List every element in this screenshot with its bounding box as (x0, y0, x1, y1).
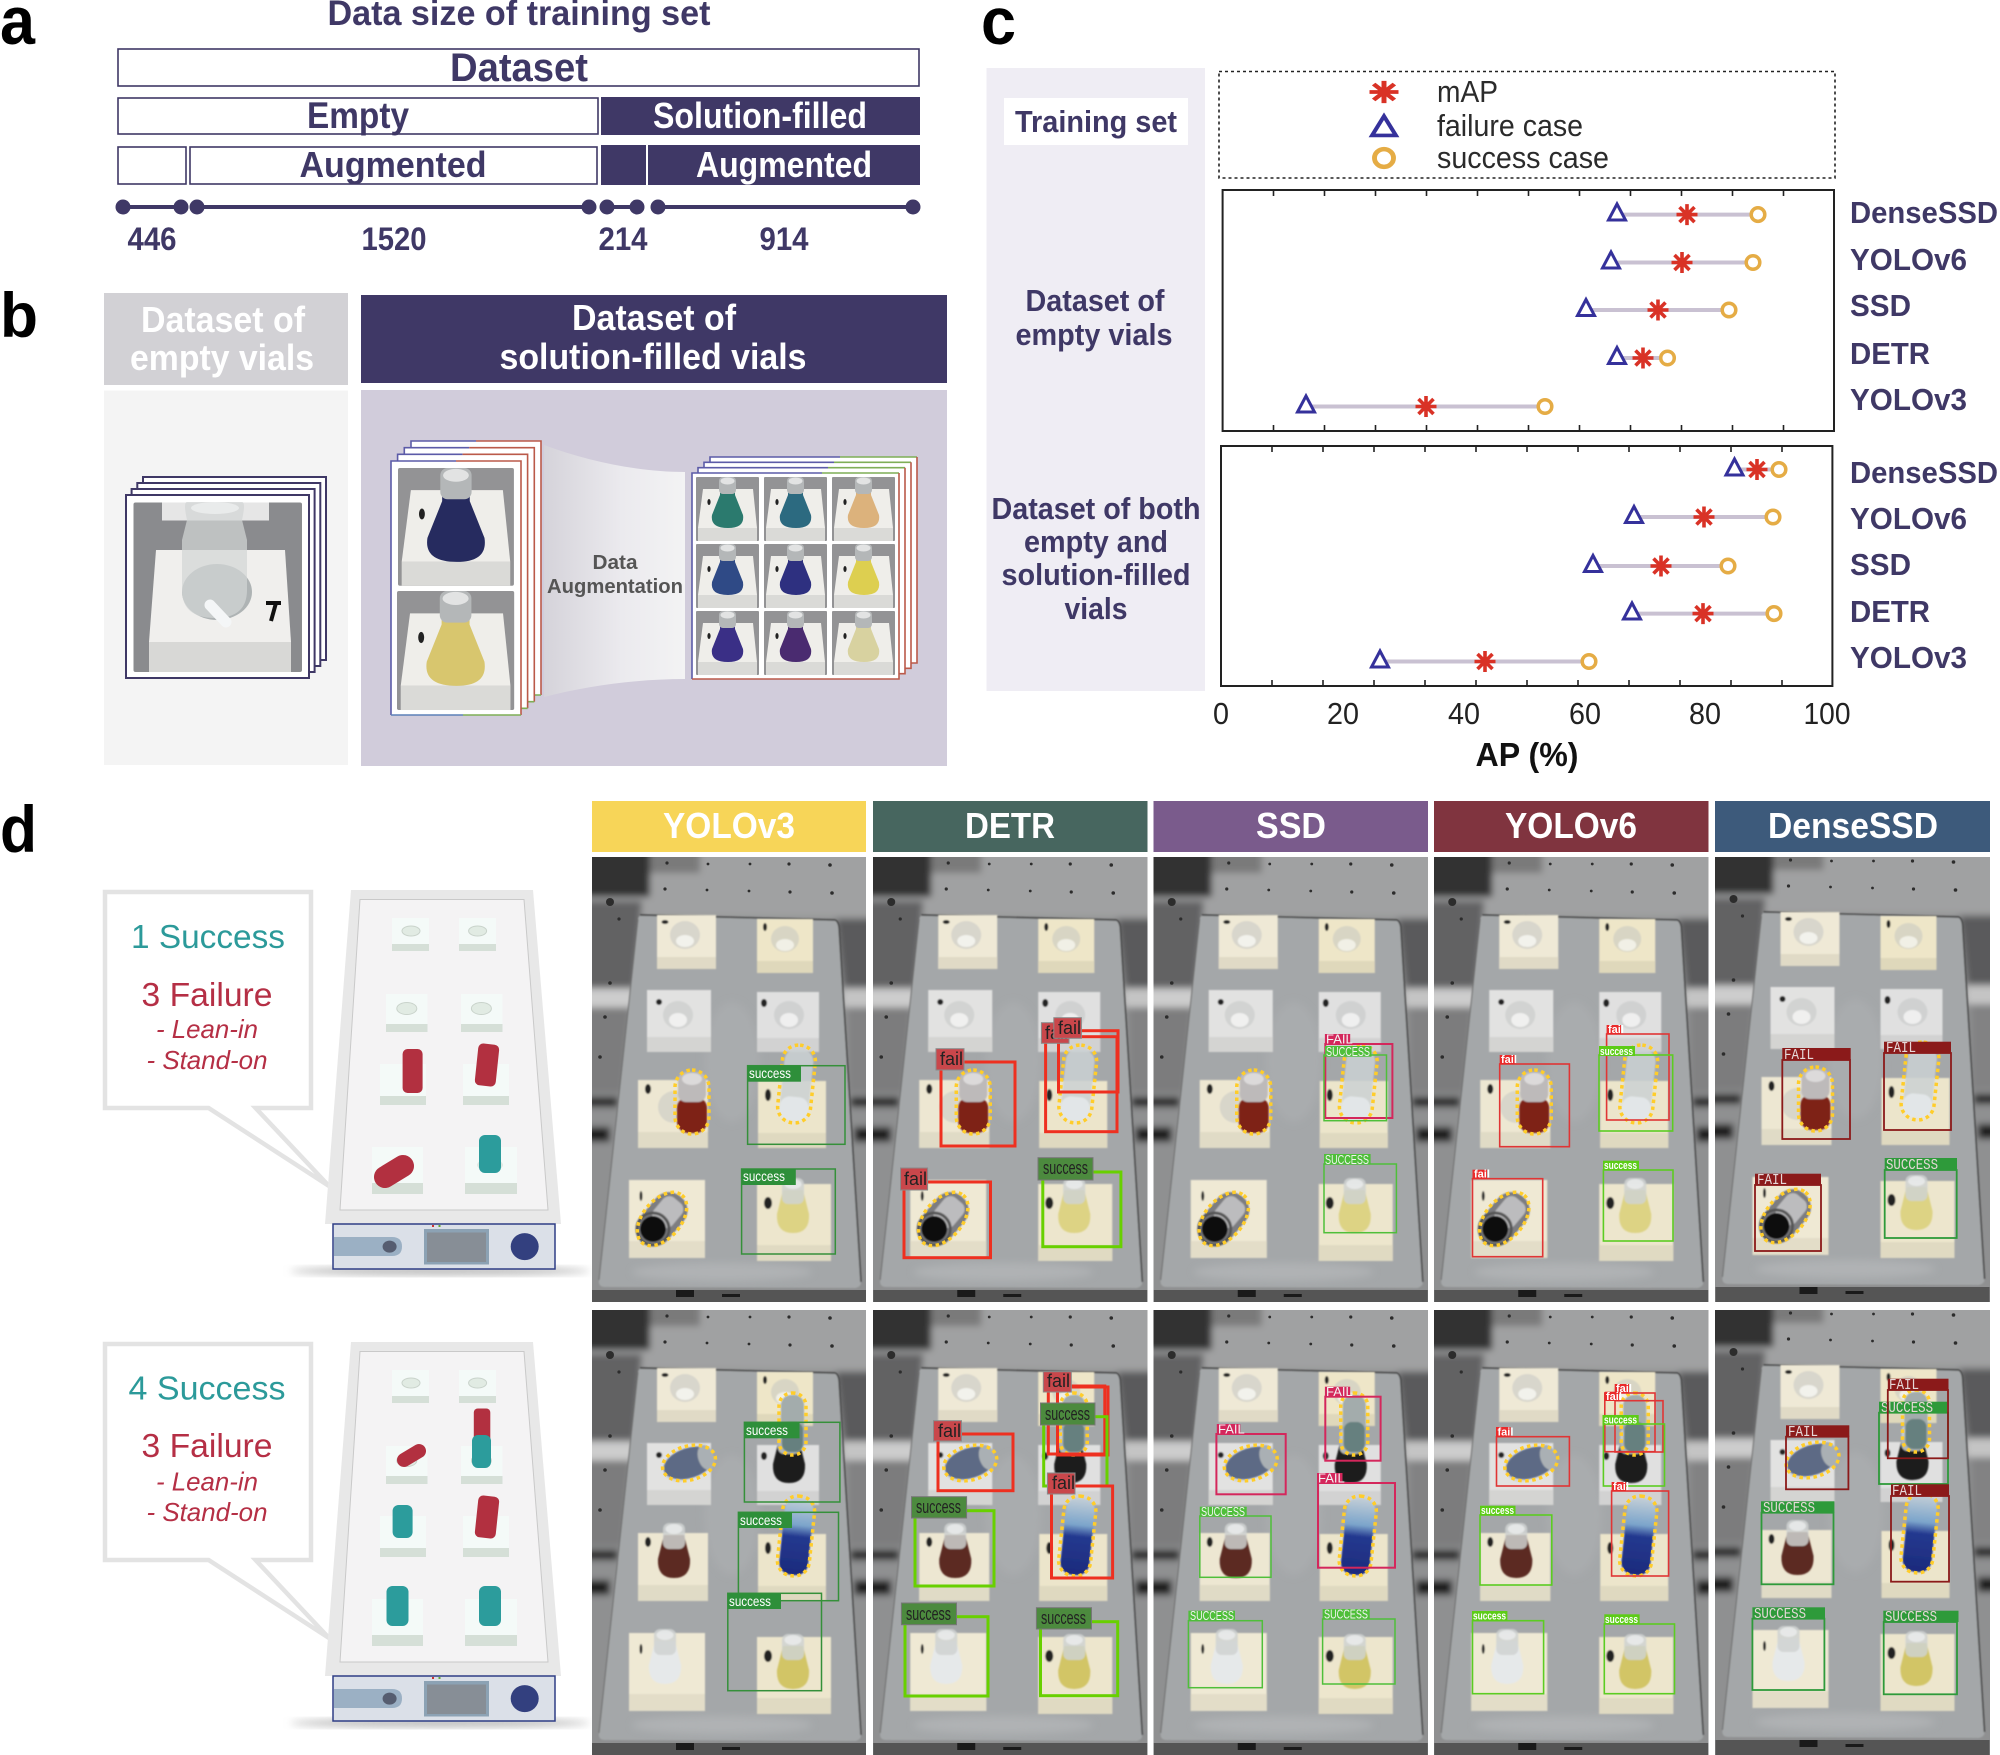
model labels: SSD (1850, 288, 1911, 323)
legend: mAP (1437, 74, 1498, 109)
photo: DETR scenario 1: fail (1058, 1018, 1081, 1038)
panel a: data size of training set (116, 0, 920, 257)
photo: YOLOv6 scenario 2: fail (1606, 1391, 1622, 1403)
callout: first scenario counts: 3 Failure (142, 976, 272, 1013)
model labels: YOLOv3 (1850, 382, 1967, 417)
photo: DenseSSD scenario 2: SUCCESS (1881, 1400, 1933, 1417)
photo: DenseSSD scenario 2 (1706, 1297, 2000, 1755)
header: dataset of empty vials (104, 293, 348, 385)
model labels: DETR (1850, 594, 1930, 629)
header: YOLOv3: YOLOv3 (663, 805, 795, 846)
photo: DenseSSD scenario 2: FAIL (1889, 1377, 1919, 1394)
photo: YOLOv3 scenario 1: success (749, 1065, 791, 1081)
funnel: data augmentation: Data (592, 551, 638, 574)
header: DETR (873, 801, 1148, 852)
model labels: YOLOv6 (1850, 501, 1967, 536)
bar: solution-filled: Solution-filled (653, 95, 867, 136)
photo: SSD scenario 2: FAIL (1318, 1470, 1345, 1486)
x axis title: AP (%) (1476, 736, 1578, 773)
header: DETR: DETR (965, 805, 1055, 846)
photo: YOLOv6 scenario 2: success (1481, 1505, 1514, 1517)
callout: first scenario counts: - Stand-on (146, 1045, 268, 1075)
photo: SSD scenario 2: FAIL (1326, 1384, 1353, 1399)
header: YOLOv6 (1434, 801, 1708, 852)
photo: DETR scenario 1: fail (1045, 1023, 1068, 1043)
photo: DenseSSD scenario 1 (1706, 844, 2000, 1324)
header: dataset of empty vials: empty vials (130, 337, 314, 378)
photo: YOLOv3 scenario 2: success (746, 1422, 788, 1438)
callout: second scenario counts (105, 1344, 329, 1638)
photo: DETR scenario 2: fail (1052, 1473, 1075, 1493)
image stack: augmented filled vials (692, 457, 917, 679)
bar: empty (118, 95, 598, 136)
photo: DETR scenario 1 (863, 847, 1157, 1327)
photo: YOLOv6 scenario 2: fail (1498, 1426, 1513, 1438)
model labels: YOLOv3 (1850, 640, 1967, 675)
photo: SSD scenario 1: SUCCESS (1325, 1152, 1369, 1167)
callout: first scenario counts (105, 892, 329, 1186)
photo: DETR scenario 2 (863, 1300, 1157, 1755)
photo: SSD scenario 1: SUCCESS (1326, 1044, 1370, 1059)
photo: DETR scenario 2: success (916, 1497, 961, 1517)
bar: empty augmented: Augmented (300, 144, 486, 185)
photo: DenseSSD scenario 2: FAIL (1788, 1424, 1818, 1441)
photo: DenseSSD scenario 1: FAIL (1757, 1172, 1787, 1189)
header: YOLOv3 (592, 801, 866, 852)
photo: DenseSSD scenario 2: SUCCESS (1754, 1606, 1806, 1623)
photo: DETR scenario 1: fail (904, 1169, 927, 1189)
photo: SSD scenario 2 (1144, 1300, 1438, 1755)
panel label b: b (0, 281, 38, 351)
bar: empty: Empty (307, 95, 409, 136)
sidebar: training set: empty and (1024, 524, 1168, 559)
legend (1219, 72, 1835, 178)
bar: empty augmented (190, 144, 597, 185)
bar: dataset (118, 46, 919, 90)
photo: DETR scenario 2: fail (1047, 1371, 1070, 1391)
x axis labels: 20 (1327, 696, 1359, 731)
photo: YOLOv3 scenario 2: success (729, 1593, 771, 1609)
image stack: empty vial (126, 477, 326, 678)
photo: SSD scenario 2: SUCCESS (1201, 1504, 1245, 1519)
photo: DETR scenario 2: success (1041, 1608, 1086, 1628)
model labels: DETR (1850, 336, 1930, 371)
header: dataset of empty vials: Dataset of (141, 299, 306, 340)
x axis labels: 80 (1689, 696, 1721, 731)
photo: SSD scenario 1: FAIL (1326, 1032, 1353, 1046)
photo: DenseSSD scenario 1: SUCCESS (1886, 1157, 1938, 1174)
panel b: empty vials dataset (104, 293, 348, 765)
illustration: second hot plate (290, 1342, 590, 1727)
photo: DETR scenario 1: success (1043, 1158, 1088, 1178)
header: YOLOv6: YOLOv6 (1505, 805, 1637, 846)
photo: DenseSSD scenario 2: SUCCESS (1763, 1500, 1815, 1517)
callout: second scenario counts: 3 Failure (142, 1427, 272, 1464)
header: DenseSSD (1715, 801, 1990, 852)
model labels: SSD (1850, 547, 1911, 582)
legend: failure case (1437, 108, 1583, 143)
photo: YOLOv6 scenario 2: fail (1613, 1481, 1629, 1493)
photo: DETR scenario 2: success (1045, 1404, 1090, 1424)
bar: dataset: Dataset (450, 46, 588, 90)
model labels: YOLOv6 (1850, 242, 1967, 277)
photo: YOLOv3 scenario 1 (582, 847, 876, 1327)
photo: DenseSSD scenario 2: SUCCESS (1885, 1609, 1937, 1626)
header: dataset of solution-filled vials: Dataset of (572, 297, 737, 338)
header: SSD (1154, 801, 1428, 852)
timeline with counts: 214 (598, 221, 648, 257)
photo: YOLOv6 scenario 2: success (1473, 1610, 1506, 1622)
photo: SSD scenario 2: FAIL (1218, 1422, 1245, 1436)
x axis labels: 60 (1569, 696, 1601, 731)
x axis labels: 100 (1804, 696, 1850, 731)
bar: filled original (601, 145, 646, 185)
callout: first scenario counts: 1 Success (131, 918, 285, 955)
callout: first scenario counts: - Lean-in (156, 1014, 258, 1044)
funnel: data augmentation: Augmentation (547, 575, 683, 598)
photo: DenseSSD scenario 2: FAIL (1892, 1483, 1922, 1500)
sidebar: training set: Dataset of both (992, 491, 1200, 526)
image stack: original filled vials (391, 441, 541, 715)
photo: YOLOv6 scenario 1: success (1600, 1046, 1633, 1058)
funnel: data augmentation (544, 445, 685, 697)
photo: DETR scenario 2: success (906, 1604, 951, 1624)
sidebar: training set: Training set (1015, 104, 1177, 139)
photo: SSD scenario 2: SUCCESS (1190, 1608, 1234, 1623)
photo: DenseSSD scenario 1: FAIL (1784, 1047, 1814, 1064)
background: filled panel (361, 390, 947, 766)
photo: YOLOv6 scenario 2: success (1605, 1614, 1638, 1626)
x axis labels (1213, 696, 1850, 731)
background: empty panel (104, 390, 348, 765)
photo: DenseSSD scenario 1: FAIL (1886, 1040, 1916, 1057)
header: SSD: SSD (1256, 805, 1326, 846)
timeline with counts (116, 200, 920, 257)
callout: second scenario counts: - Stand-on (146, 1497, 268, 1527)
photo: YOLOv6 scenario 1: success (1604, 1160, 1637, 1172)
photo: YOLOv3 scenario 1: success (743, 1168, 785, 1184)
photo: YOLOv6 scenario 1 (1424, 847, 1718, 1327)
photo: DETR scenario 1: fail (940, 1049, 963, 1069)
photo: SSD scenario 1 (1144, 847, 1438, 1327)
photo: YOLOv6 scenario 1: fail (1474, 1169, 1490, 1181)
bar: filled augmented: Augmented (696, 144, 872, 185)
sidebar: training set: solution-filled (1002, 557, 1190, 592)
legend: success case (1437, 140, 1609, 175)
x axis labels: 0 (1213, 696, 1229, 731)
photo: YOLOv3 scenario 2: success (740, 1512, 782, 1528)
header: dataset of solution-filled vials (361, 295, 947, 383)
panel b: solution-filled vials dataset (361, 295, 947, 766)
sidebar: training set: Dataset of (1026, 283, 1165, 318)
sidebar: training set: vials (1064, 591, 1128, 626)
illustration: first hot plate (290, 890, 590, 1275)
panel label d: d (0, 792, 37, 866)
header: dataset of solution-filled vials: solution-filled vials (500, 336, 806, 377)
photo: YOLOv6 scenario 1: fail (1501, 1054, 1517, 1066)
header: DenseSSD: DenseSSD (1768, 805, 1938, 846)
sidebar: training set (986, 68, 1205, 691)
timeline with counts: 446 (128, 221, 176, 257)
panel c: AP chart (986, 68, 1998, 773)
photo: YOLOv6 scenario 1: fail (1608, 1024, 1624, 1036)
callout: second scenario counts: - Lean-in (156, 1466, 258, 1496)
timeline with counts: 1520 (362, 221, 426, 257)
photo: YOLOv6 scenario 2 (1424, 1300, 1718, 1755)
photo: DETR scenario 2: fail (938, 1421, 961, 1441)
photo: SSD scenario 2: SUCCESS (1324, 1606, 1368, 1622)
callout: second scenario counts: 4 Success (128, 1370, 286, 1406)
model labels (1850, 195, 1998, 675)
plot: empty and filled vials (1221, 446, 1832, 686)
bar: empty original (118, 147, 186, 184)
photo: YOLOv6 scenario 2: fail (1616, 1383, 1632, 1395)
sidebar: training set: empty vials (1016, 317, 1172, 352)
photo: YOLOv3 scenario 2 (582, 1300, 876, 1755)
plot: empty vials (1223, 190, 1834, 431)
timeline with counts: 914 (760, 221, 809, 257)
x axis labels: 40 (1448, 696, 1480, 731)
photo: YOLOv6 scenario 2: success (1604, 1414, 1637, 1426)
